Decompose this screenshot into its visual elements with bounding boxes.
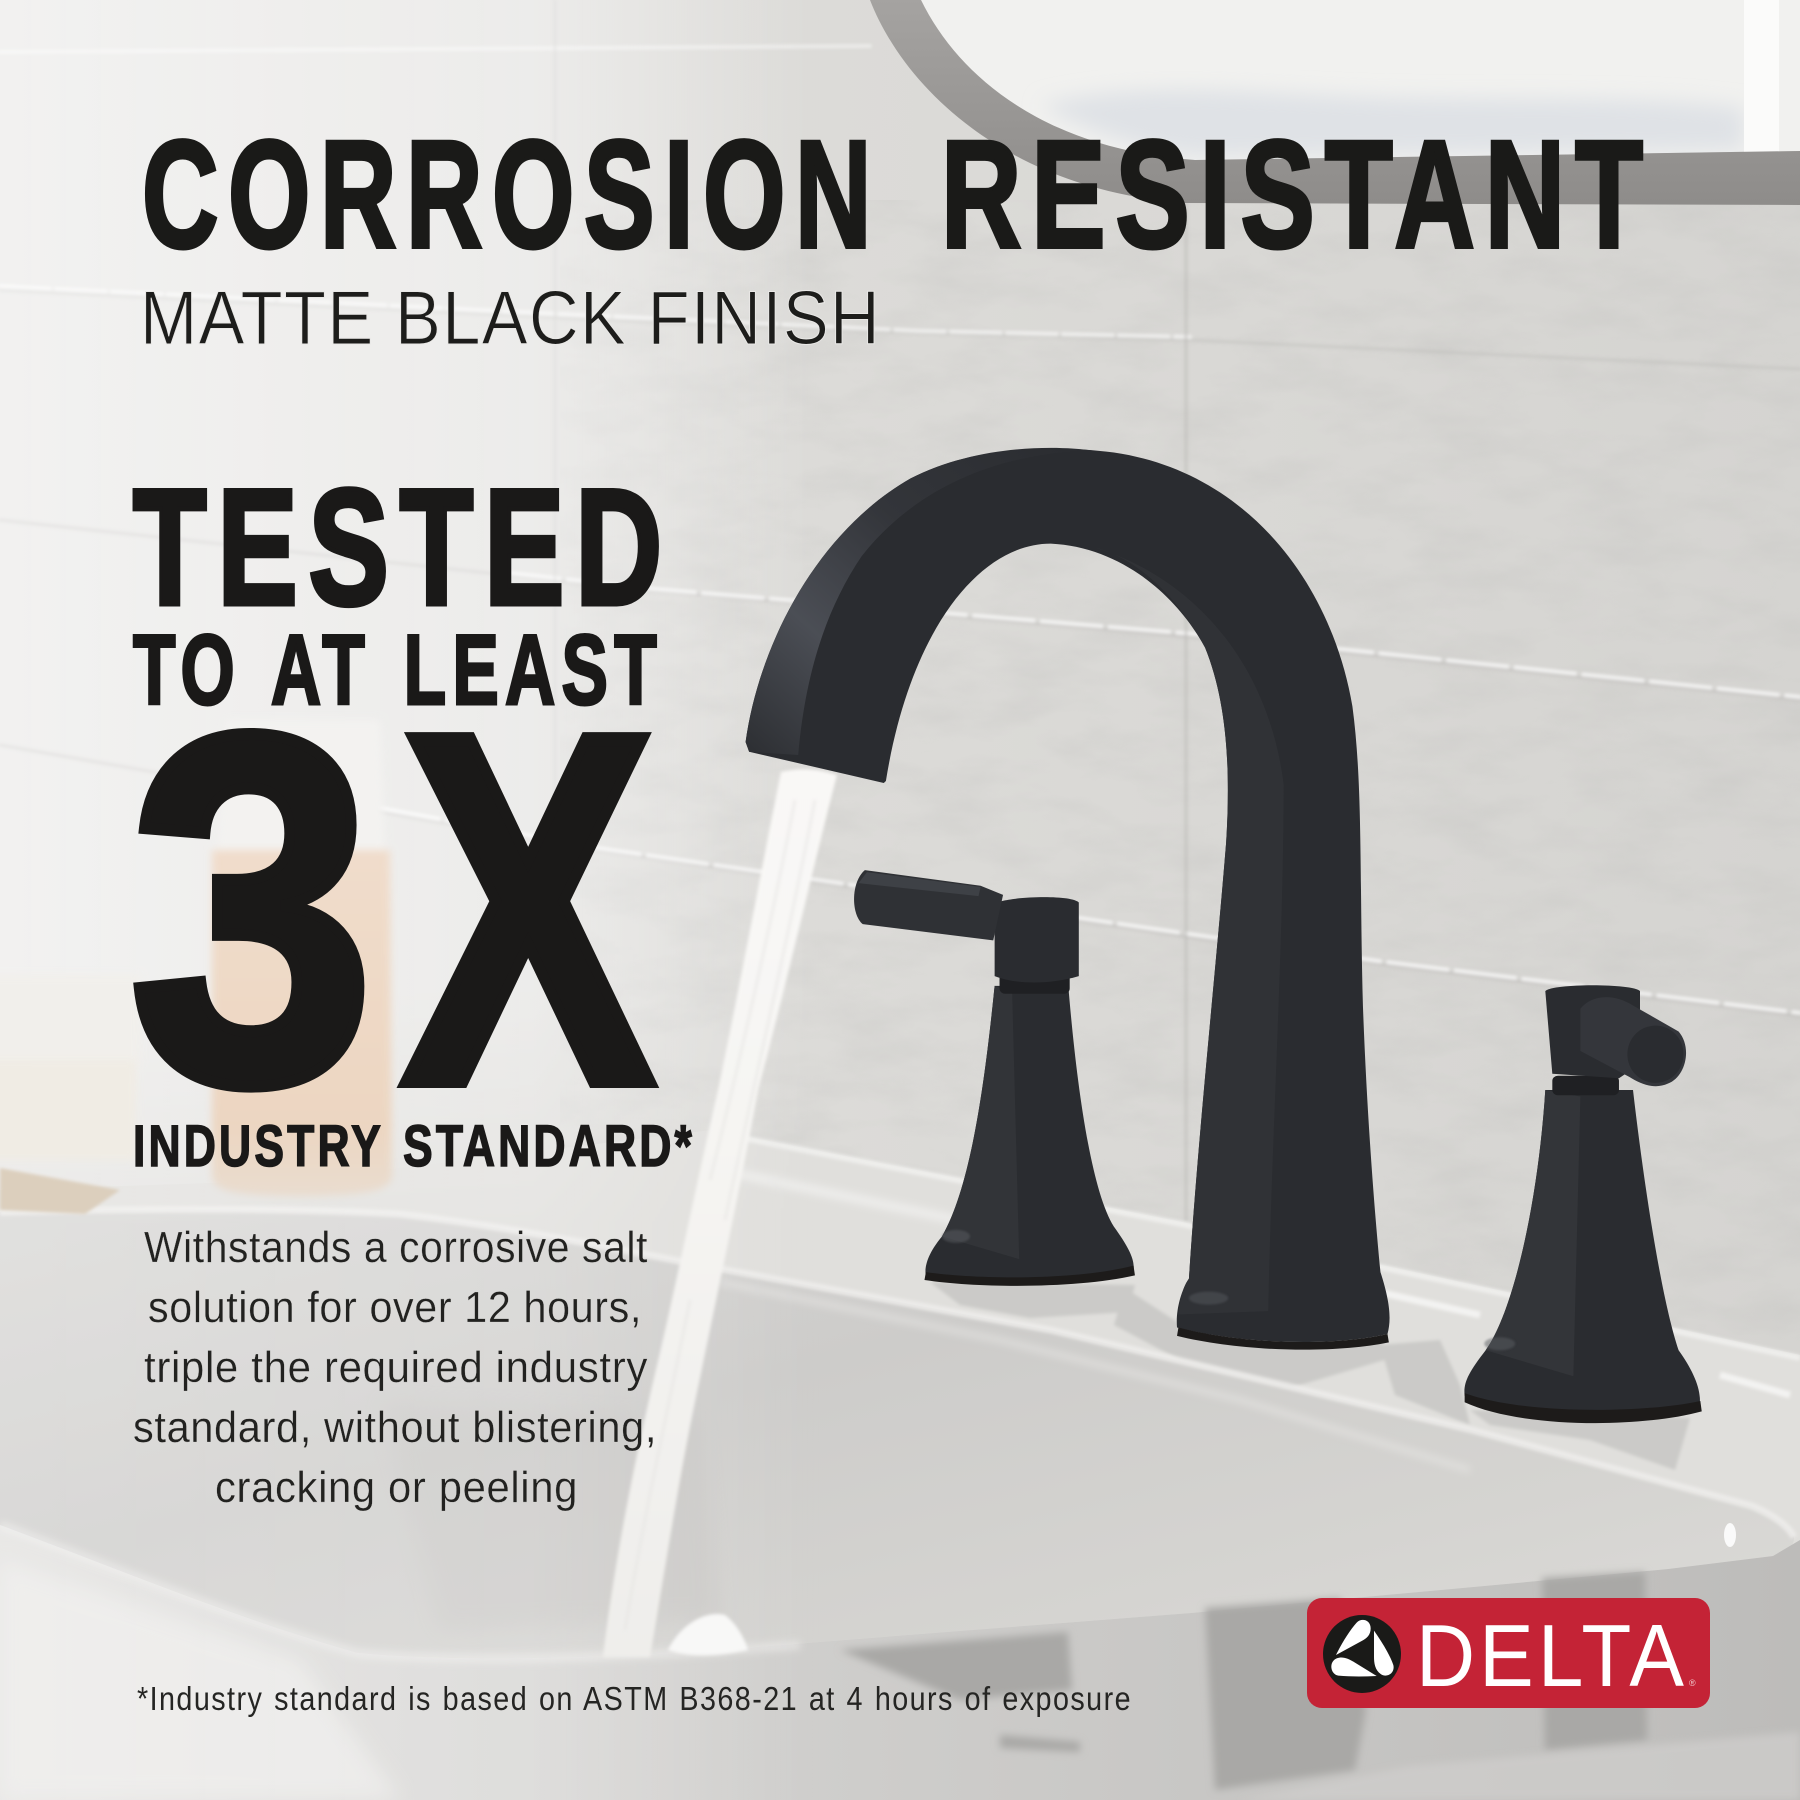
faucet reflections on counter — [930, 1282, 1690, 1470]
subtitle: matte black finish: MATTE BLACK FINISH — [140, 276, 881, 361]
big number: 3X — [129, 632, 655, 1187]
sink basin — [0, 1209, 1794, 1659]
registered mark: ® — [1689, 1678, 1696, 1688]
description text block: cracking or peeling — [215, 1463, 578, 1512]
footnote: *Industry standard is based on ASTM B368-21 at 4 hours of exposure — [137, 1680, 1132, 1717]
faucet — [746, 448, 1702, 1423]
icon: Delta triangle mark — [1323, 1615, 1401, 1693]
blurred cosmetics on the counter — [0, 720, 392, 1214]
big number: 3X: X — [403, 632, 655, 1187]
description text block: triple the required industry — [144, 1343, 648, 1392]
description text block: Withstands a corrosive salt — [144, 1223, 648, 1272]
sink front and reflections — [0, 1525, 1800, 1800]
description text block — [133, 1223, 657, 1512]
spout — [746, 448, 1390, 1350]
Delta logo — [1307, 1598, 1710, 1708]
wordmark: DELTA: DELTA — [1416, 1606, 1688, 1705]
water splash — [668, 1614, 748, 1655]
mirror with frame — [870, 0, 1800, 205]
claim line: to at least: TO AT LEAST — [133, 614, 663, 725]
claim line: industry standard: INDUSTRY STANDARD* — [133, 1114, 695, 1179]
right handle — [1464, 985, 1702, 1423]
claim word: tested: TESTED — [133, 455, 673, 639]
description text block: solution for over 12 hours, — [148, 1283, 642, 1332]
claim: tested to at least 3X industry standard — [129, 455, 695, 1187]
big number: 3X: 3 — [129, 632, 375, 1187]
left handle — [854, 870, 1135, 1286]
white wash over the left of the photo — [0, 0, 680, 1800]
water stream — [603, 769, 837, 1657]
title: corrosion resistant: CORROSION — [142, 109, 881, 280]
sink countertop — [0, 1130, 1800, 1640]
description text block: standard, without blistering, — [133, 1403, 657, 1452]
